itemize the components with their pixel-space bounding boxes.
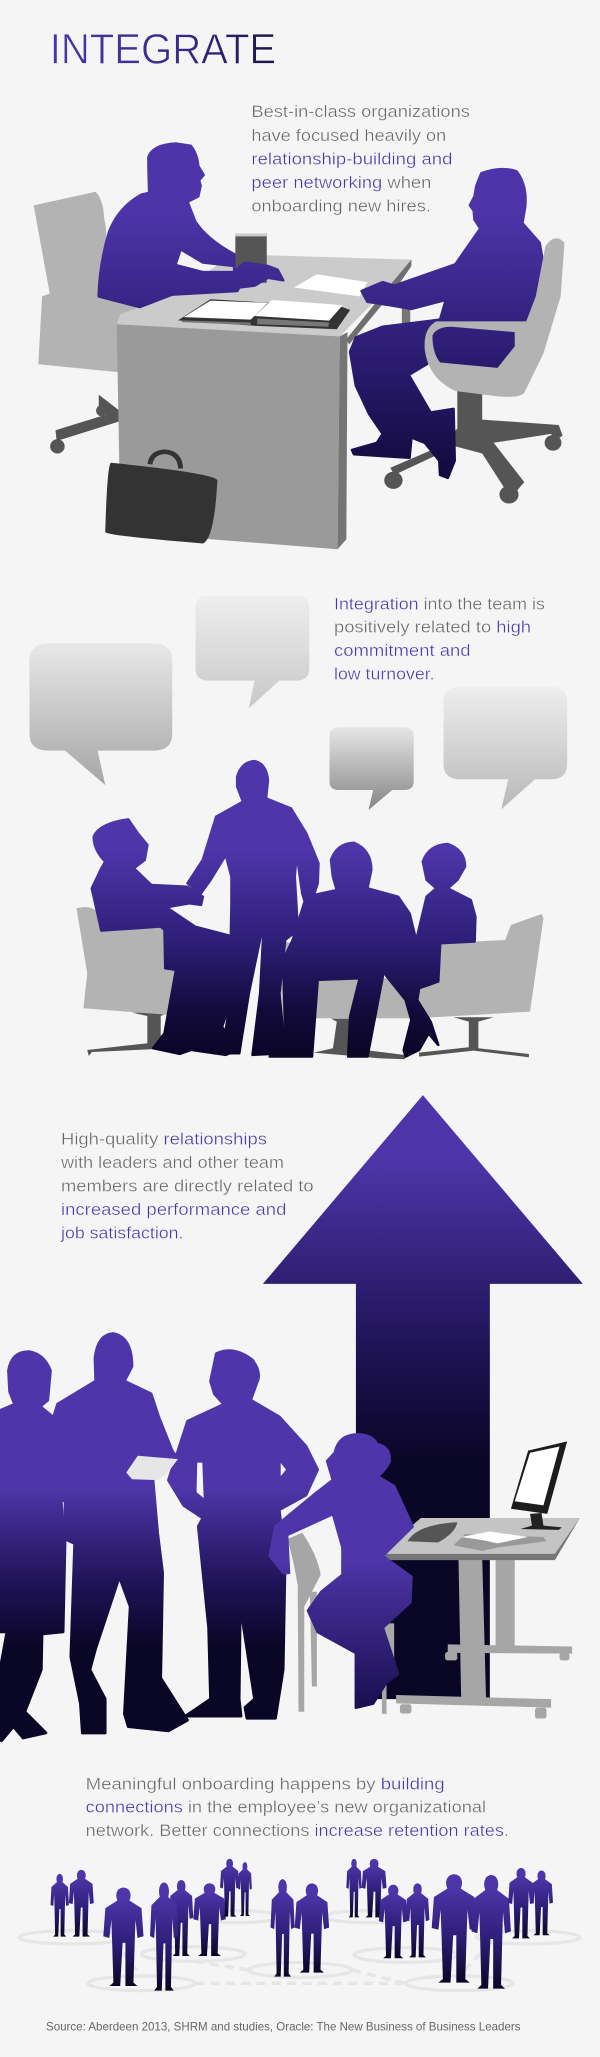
seated person centre: [270, 843, 415, 1057]
text block 2: [334, 594, 545, 683]
stool: [287, 1533, 394, 1714]
briefcase: [105, 452, 217, 544]
tablet: [126, 1456, 178, 1480]
speech bubble 3: [330, 727, 414, 810]
seated woman: [379, 844, 475, 1057]
left person: [99, 144, 283, 307]
monitor: [511, 1441, 567, 1530]
text block 1: [251, 102, 470, 215]
standing man: [188, 761, 318, 1055]
man hands on hips: [168, 1351, 318, 1718]
text block 4: network. Better connections increase retention rates .: [86, 1821, 509, 1840]
text block 2: commitment and: [334, 641, 471, 660]
seated woman on stool: [270, 1435, 413, 1708]
chairs: [77, 907, 543, 1047]
text block 1: Best-in-class organizations: [251, 102, 470, 121]
text block 1: have focused heavily on: [251, 126, 446, 145]
people silhouettes: [51, 1859, 553, 1991]
desk block: [235, 234, 267, 283]
network circles: [19, 1911, 580, 1991]
panel: meeting at desk: [34, 144, 564, 549]
chair bases: [87, 1013, 529, 1059]
panel: growth arrow and team: [0, 1095, 583, 1740]
right person: [350, 169, 543, 478]
text block 4: connections in the employee’s new organizational: [86, 1797, 486, 1816]
up arrow: [263, 1095, 583, 1699]
text block 1: peer networking when: [251, 173, 431, 192]
seated man: [92, 819, 242, 1055]
open book: [453, 1532, 546, 1551]
right chair base: [384, 391, 563, 504]
text block 2: low turnover.: [334, 664, 435, 683]
open folder: [178, 299, 350, 329]
text block 4: [86, 1774, 509, 1840]
paper: [294, 274, 367, 296]
text block 3: increased performance and: [61, 1200, 286, 1219]
text block 3: job satisfaction.: [60, 1223, 184, 1242]
text block 2: Integration into the team is: [334, 594, 545, 613]
desk: [117, 254, 411, 549]
speech bubble 2: [196, 596, 309, 708]
panel: network of people: [19, 1859, 580, 1991]
text block 3: with leaders and other team: [60, 1153, 284, 1172]
right chair: [425, 238, 564, 397]
source line: Source: Aberdeen 2013, SHRM and studies, Oracle: The New Business of Business Leaders: [46, 2020, 520, 2034]
text block 2: positively related to high: [334, 618, 531, 637]
text block 1: onboarding new hires.: [251, 196, 431, 215]
right person arm in chair: [432, 327, 515, 368]
man in centre: [54, 1334, 188, 1733]
speech bubble 1: [29, 643, 172, 785]
text block 3: members are directly related to: [61, 1177, 314, 1196]
panel: speech bubbles and team: [29, 596, 567, 1059]
office table: [379, 1518, 580, 1719]
text block 1: relationship-building and: [251, 149, 452, 168]
text block 3: High-quality relationships: [61, 1129, 267, 1148]
left chair: [34, 192, 138, 454]
speech bubble 4: [444, 687, 567, 809]
text block 4: Meaningful onboarding happens by building: [86, 1774, 445, 1793]
title: INTEGRATE: [50, 26, 276, 74]
woman with document: [0, 1352, 107, 1740]
text block 3: [60, 1129, 314, 1242]
